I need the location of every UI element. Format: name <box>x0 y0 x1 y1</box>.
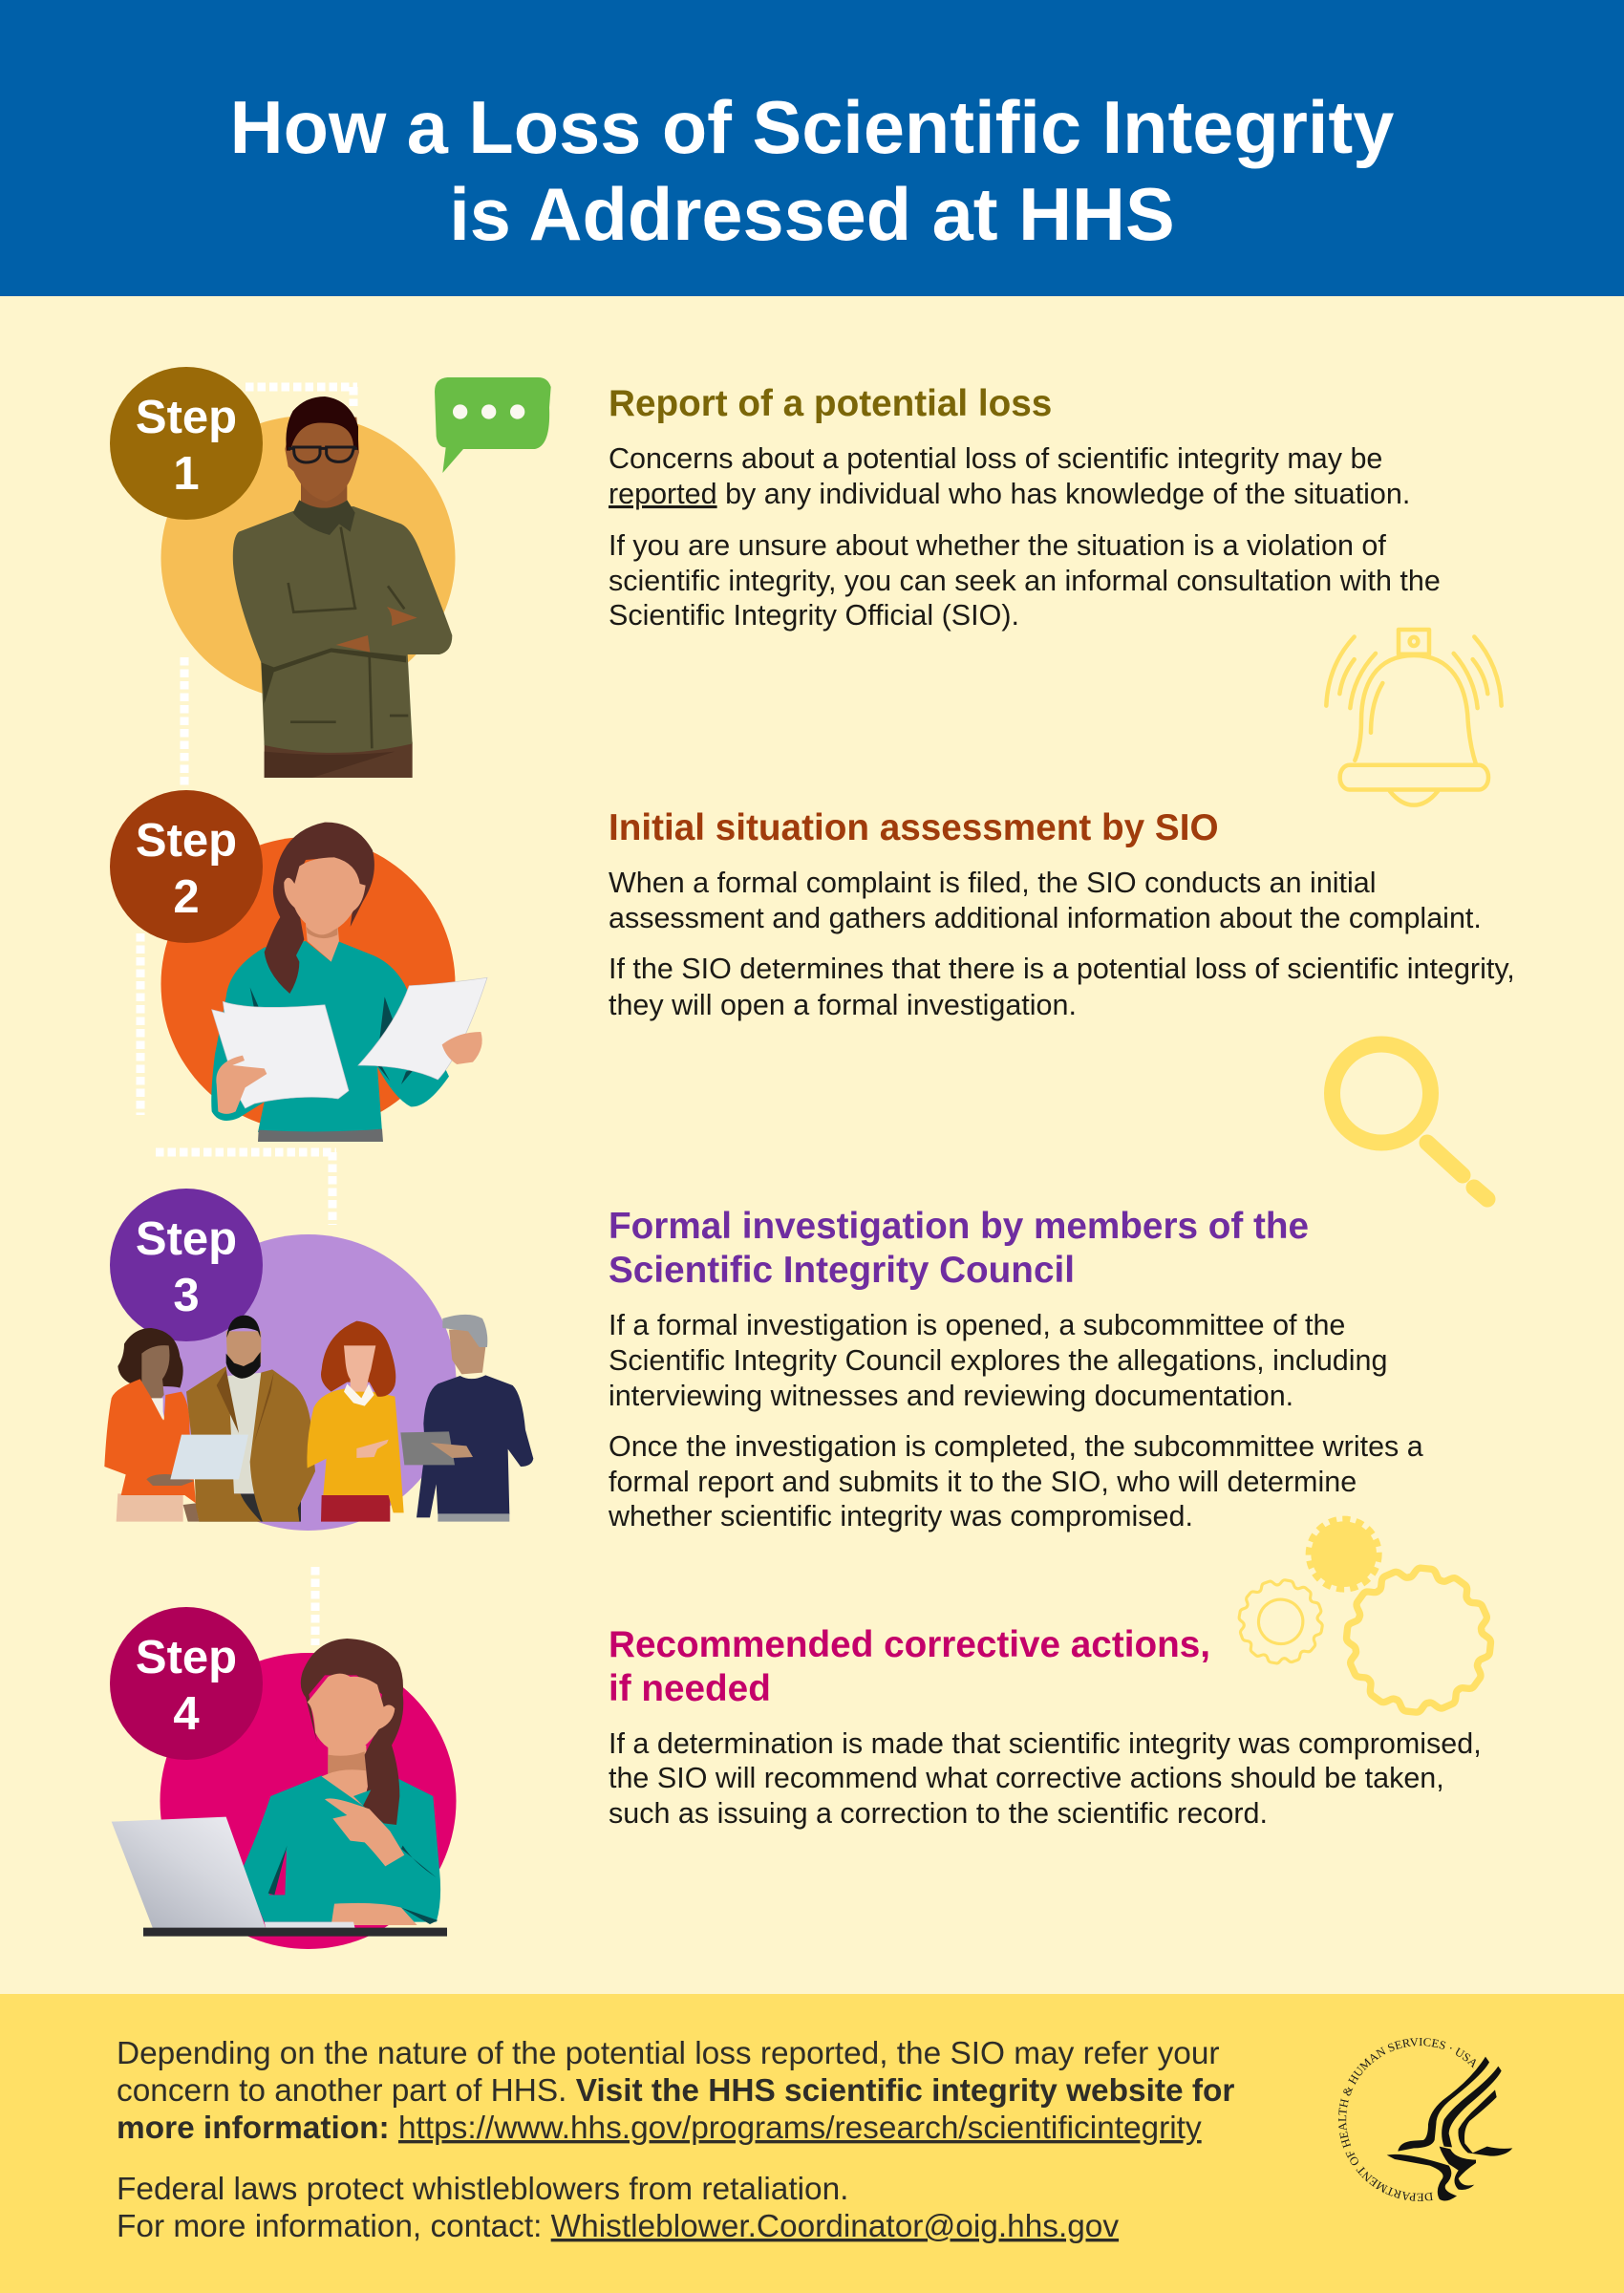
icon: gears <box>1232 1520 1498 1719</box>
backdrop circle 1 <box>160 416 455 700</box>
heading: step 2: Initial situation assessment by SIO <box>609 807 1219 848</box>
heading: step 4: Recommended corrective actions, <box>609 1624 1210 1665</box>
text block: step 1: Scientific Integrity Official (SIO). <box>609 599 1019 632</box>
text block: step 3: Scientific Integrity Council explores the allegations, including <box>609 1344 1387 1377</box>
backdrop circle 3 <box>160 1234 457 1531</box>
text block: step 1: Concerns about a potential loss of scientific integrity may be <box>609 442 1382 475</box>
badge: step 3 <box>110 1189 263 1341</box>
text block: step 2: If the SIO determines that there is a potential loss of scientific integrity, <box>609 953 1515 985</box>
text block: step 2: When a formal complaint is filed, the SIO conducts an initial <box>609 867 1377 899</box>
backdrop circle 2 <box>160 837 455 1131</box>
badge: step 1: Step <box>136 392 237 443</box>
heading: step 4 <box>609 1624 1210 1709</box>
text block: step 2: assessment and gathers additional information about the complaint. <box>609 902 1482 934</box>
badge: step 1 <box>110 367 263 520</box>
footer text: further information: Depending on the nature of the potential loss reported, the SIO may refer your <box>117 2036 1220 2071</box>
icon: magnifying glass <box>1332 1044 1487 1199</box>
badge: step 3: 3 <box>173 1270 200 1321</box>
connector: dotted path between steps <box>140 387 357 1645</box>
panel: step 4 <box>110 1607 1482 1949</box>
small outline gear <box>1232 1574 1329 1670</box>
text block: step 4: such as issuing a correction to the scientific record. <box>609 1797 1268 1830</box>
title <box>230 87 1394 256</box>
badge: step 4: 4 <box>173 1688 200 1740</box>
heading: step 3: Scientific Integrity Council <box>609 1250 1075 1291</box>
text block: step 1 <box>609 442 1441 632</box>
text block: step 2: they will open a formal investigation. <box>609 989 1077 1021</box>
footer text: further information: more information: https://www.hhs.gov/programs/research/scientificintegrity <box>117 2111 1202 2146</box>
footer text: further information <box>117 2036 1234 2146</box>
panel: step 2 <box>110 790 1515 1199</box>
large outline gear <box>1339 1561 1498 1719</box>
text block: step 1: If you are unsure about whether the situation is a violation of <box>609 529 1386 562</box>
illustration: woman at laptop <box>112 1639 447 1937</box>
text block: step 4: the SIO will recommend what corrective actions should be taken, <box>609 1762 1444 1794</box>
text block: step 4 <box>609 1727 1482 1830</box>
footer text: whistleblower contact <box>117 2172 1119 2244</box>
badge: step 1: 1 <box>173 448 200 500</box>
heading: step 4: if needed <box>609 1668 771 1709</box>
panel: footer <box>0 1994 1624 2293</box>
text block: step 3: interviewing witnesses and reviewing documentation. <box>609 1380 1293 1412</box>
footer text: whistleblower contact: Federal laws protect whistleblowers from retaliation. <box>117 2172 848 2207</box>
heading: step 3: Formal investigation by members of the <box>609 1206 1309 1247</box>
illustration: man with crossed arms <box>233 396 452 778</box>
badge: step 2: Step <box>136 815 237 867</box>
panel: step 3 <box>104 1189 1498 1719</box>
text block: step 3: formal report and submits it to the SIO, who will determine <box>609 1466 1357 1498</box>
logo: HHS seal: DEPARTMENT OF HEALTH & HUMAN SERVICES · USA <box>1338 2038 1476 2201</box>
text block: step 1: scientific integrity, you can seek an informal consultation with the <box>609 565 1441 597</box>
icon: ringing bell <box>1326 630 1502 805</box>
text block: step 3: whether scientific integrity was compromised. <box>608 1500 1193 1532</box>
panel: step 1 <box>110 367 1502 805</box>
title: is Addressed at HHS <box>449 174 1175 256</box>
heading: step 3 <box>609 1206 1309 1291</box>
badge: step 2: 2 <box>173 871 200 923</box>
person: grey-haired man with tablet <box>400 1315 533 1522</box>
illustration: woman reading papers <box>211 823 487 1142</box>
filled gear <box>1310 1520 1378 1589</box>
text block: step 1: reported by any individual who has knowledge of the situation. <box>609 478 1410 510</box>
person: bearded man in brown jacket <box>186 1316 315 1522</box>
header banner with title <box>0 0 1624 296</box>
title: How a Loss of Scientific Integrity <box>230 87 1394 169</box>
text block: step 2 <box>609 867 1515 1021</box>
person: woman in orange <box>104 1328 199 1522</box>
icon: green speech bubble <box>435 377 551 473</box>
badge: step 3: Step <box>136 1213 237 1265</box>
backdrop circle 4 <box>160 1653 457 1949</box>
badge: step 2 <box>110 790 263 943</box>
footer text: further information: concern to another part of HHS. Visit the HHS scientific integrity website for <box>117 2073 1234 2109</box>
badge: step 4 <box>110 1607 263 1760</box>
person: woman in yellow sweater <box>307 1321 404 1522</box>
text block: step 3 <box>608 1309 1423 1532</box>
heading: step 1: Report of a potential loss <box>609 383 1052 424</box>
text block: step 3: Once the investigation is completed, the subcommittee writes a <box>609 1430 1423 1463</box>
text block: step 3: If a formal investigation is opened, a subcommittee of the <box>609 1309 1345 1341</box>
text block: step 4: If a determination is made that scientific integrity was compromised, <box>609 1727 1482 1760</box>
badge: step 4: Step <box>136 1632 237 1683</box>
icon: open laptop <box>170 1435 248 1479</box>
footer text: whistleblower contact: For more information, contact: Whistleblower.Coordinator@oig.hhs.gov <box>117 2209 1119 2244</box>
illustration: four colleagues <box>104 1315 533 1522</box>
